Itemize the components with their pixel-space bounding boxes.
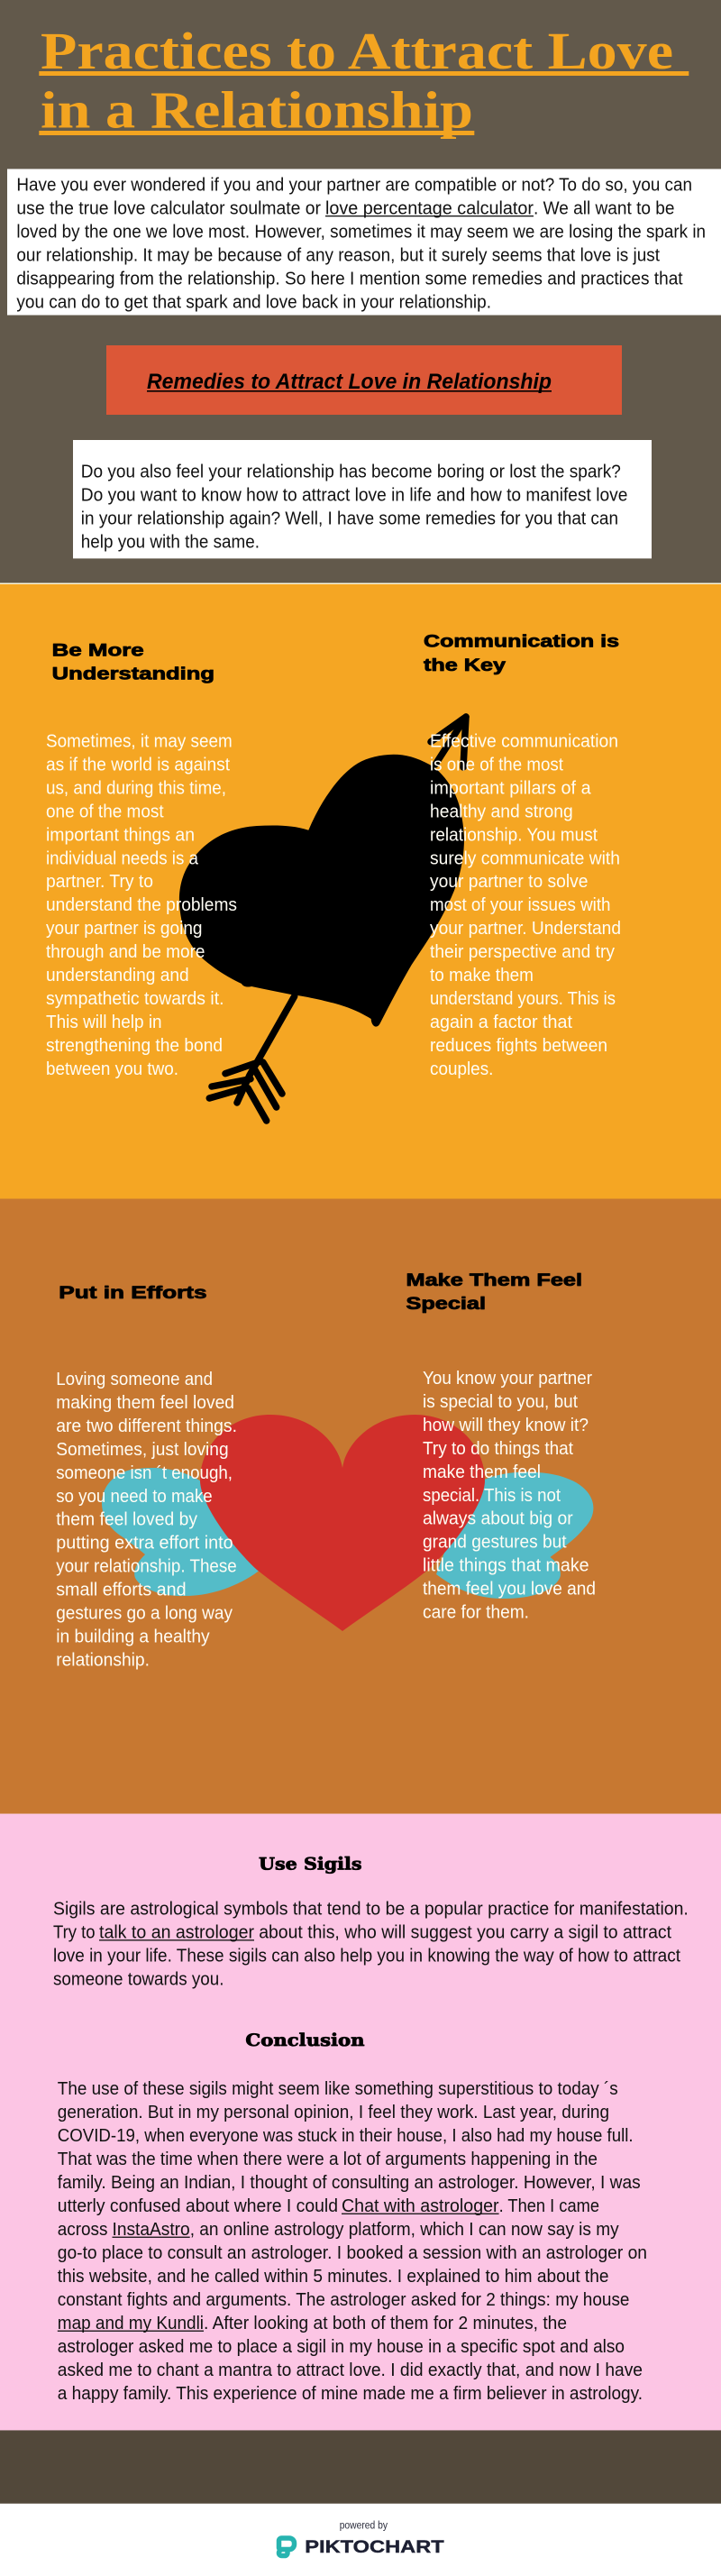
text: communication is the key: important pillars of a [430, 778, 591, 798]
text: make them feel special [423, 1369, 596, 1623]
text: communication is the key: surely communicate with [430, 848, 620, 868]
panel: remedies introduction: Do you want to know how to attract love in life and how to manifest love [81, 485, 627, 505]
heading: conclusion: Conclusion [245, 2031, 365, 2050]
text: conclusion: this website, and he called within 5 minutes. I explained to him about the [58, 2267, 609, 2287]
text: conclusion: generation. But in my personal opinion, I feel they work. Last year, during [58, 2103, 609, 2122]
text: make them feel special: always about big or [423, 1509, 573, 1529]
text: conclusion: across [58, 2220, 107, 2240]
panel: dark footer band [0, 2430, 721, 2504]
text: use sigils: about this, who will suggest you carry a sigil to attract [259, 1923, 671, 1943]
text: conclusion: asked me to chant a mantra to attract love. I did exactly that, and now I have [58, 2361, 643, 2380]
text: use sigils: someone towards you. [53, 1969, 224, 1989]
text: conclusion: . After looking at both of them for 2 minutes, the [204, 2314, 567, 2333]
panel: introduction text: love percentage calculator [325, 198, 534, 218]
panel: introduction text: Have you ever wondered if you and your partner are compatible or not? To do so, you can [16, 175, 692, 195]
text: conclusion: COVID-19, when everyone was stuck in their house, I also had my house full. [58, 2126, 634, 2146]
text: conclusion: astrologer asked me to place a sigil in my house in a specific spot and also [58, 2337, 625, 2357]
icon: black heart with arrow [179, 717, 466, 1121]
text: use sigils [53, 1900, 689, 1989]
panel: understanding and communication [0, 582, 721, 1199]
text: make them feel special: is special to you, but [423, 1392, 578, 1412]
text: conclusion: map and my Kundli [58, 2314, 204, 2333]
heading: communication is the key: the Key [424, 656, 507, 675]
panel: introduction text: disappearing from the relationship. So here I mention some remedies and practices that [16, 269, 683, 289]
text: communication is the key: understand yours. This is [430, 989, 616, 1009]
panel: remedies introduction: help you with the same. [81, 532, 260, 552]
text: conclusion: utterly confused about where I could [58, 2196, 338, 2216]
text: conclusion: a happy family. This experience of mine made me a firm believer in astrology. [58, 2384, 643, 2404]
heading: communication is the key: Communication is [424, 633, 619, 651]
text: communication is the key: most of your issues with [430, 895, 611, 915]
text: use sigils: talk to an astrologer [99, 1923, 254, 1943]
text: communication is the key: healthy and strong [430, 802, 573, 821]
text: be more understanding: understand the problems [46, 895, 237, 915]
panel: header [0, 0, 721, 582]
text: be more understanding: through and be more [46, 942, 205, 962]
text: powered by: powered by [340, 2520, 388, 2531]
panel: piktochart footer [0, 2504, 721, 2576]
heading: make them feel special: Make Them Feel [406, 1271, 582, 1290]
panel: remedies introduction: in your relationship again? Well, I have some remedies for you that can [81, 509, 618, 528]
text: conclusion: . Then I came [499, 2196, 599, 2216]
text: put in efforts: making them feel loved [56, 1393, 234, 1413]
panel: remedies heading: Remedies to Attract Love in Relationship [147, 370, 552, 394]
text: piktochart wordmark: PIKTOCHART [305, 2538, 444, 2557]
text: put in efforts [56, 1370, 237, 1670]
text: put in efforts: so you need to make [56, 1487, 213, 1507]
text: be more understanding: your partner is going [46, 919, 202, 939]
text: make them feel special: them feel you love and [423, 1580, 596, 1600]
text: be more understanding: individual needs is a [46, 848, 199, 868]
text: put in efforts: in building a healthy [56, 1627, 210, 1646]
text: put in efforts: gestures go a long way [56, 1603, 233, 1623]
text: communication is the key: to make them [430, 966, 534, 985]
text: make them feel special: Try to do things that [423, 1439, 573, 1459]
text: use sigils: Try to [53, 1923, 96, 1943]
text: make them feel special: how will they know it? [423, 1416, 589, 1435]
text: put in efforts: Loving someone and [56, 1370, 213, 1389]
text: be more understanding: sympathetic towards it. [46, 989, 224, 1009]
title: in a Relationship [41, 81, 473, 140]
panel: introduction text: use the true love calculator soulmate or [16, 198, 321, 218]
text: be more understanding: partner. Try to [46, 872, 153, 892]
panel: introduction text [7, 169, 721, 316]
heading: be more understanding [52, 641, 214, 683]
heading: communication is the key [424, 633, 619, 675]
text: communication is the key: their perspective and try [430, 942, 615, 962]
text: communication is the key [430, 732, 621, 1079]
heading: make them feel special: Special [406, 1295, 486, 1314]
text: conclusion: InstaAstro [112, 2220, 190, 2240]
text: be more understanding: between you two. [46, 1059, 178, 1079]
text: be more understanding: us, and during this time, [46, 778, 226, 798]
heading: use sigils: Use Sigils [259, 1854, 362, 1874]
text: put in efforts: them feel loved by [56, 1510, 197, 1530]
text: be more understanding: understanding and [46, 966, 189, 985]
text: make them feel special: care for them. [423, 1603, 529, 1623]
panel: remedies introduction: Do you also feel your relationship has become boring or lost the spark? [81, 462, 621, 481]
text: make them feel special: grand gestures but [423, 1533, 567, 1553]
text: conclusion: Chat with astrologer [342, 2196, 499, 2216]
text: make them feel special: special. This is not [423, 1486, 561, 1506]
text: put in efforts: small efforts and [56, 1581, 187, 1600]
text: use sigils: love in your life. These sigils can also help you in knowing the way of how to attract [53, 1946, 680, 1966]
heading: put in efforts: Put in Efforts [59, 1284, 207, 1303]
panel: sigils and conclusion [0, 1814, 721, 2430]
text: be more understanding: strengthening the bond [46, 1036, 223, 1056]
heading: be more understanding: Be More [52, 641, 144, 660]
text: be more understanding [46, 732, 237, 1079]
text: be more understanding: This will help in [46, 1013, 162, 1032]
text: use sigils: Sigils are astrological symbols that tend to be a popular practice for manifestation. [53, 1900, 689, 1920]
panel: introduction text: you can do to get that spark and love back in your relationship. [16, 292, 491, 312]
text: conclusion: , an online astrology platform, which I can now say is my [190, 2220, 619, 2240]
title: Practices to Attract Love [41, 22, 673, 80]
text: conclusion: constant fights and arguments. The astrologer asked for 2 things: my house [58, 2290, 630, 2310]
panel: efforts and feeling special [0, 1199, 721, 1814]
heading: make them feel special [406, 1271, 582, 1314]
text: conclusion: That was the time when there were a lot of arguments happening in the [58, 2150, 598, 2169]
text: communication is the key: your partner to solve [430, 872, 588, 892]
text: make them feel special: make them feel [423, 1462, 541, 1482]
text: conclusion: go-to place to consult an astrologer. I booked a session with an astrologer on [58, 2243, 647, 2263]
text: communication is the key: relationship. You must [430, 825, 598, 845]
panel: remedies introduction [73, 440, 652, 558]
panel: remedies heading [106, 345, 622, 415]
text: communication is the key: again a factor that [430, 1013, 572, 1032]
text: be more understanding: important things an [46, 825, 195, 845]
text: put in efforts: Sometimes, just loving [56, 1440, 229, 1460]
text: put in efforts: your relationship. These [56, 1557, 237, 1577]
heading: be more understanding: Understanding [52, 665, 214, 683]
title [39, 22, 689, 140]
text: put in efforts: are two different things. [56, 1416, 237, 1436]
text: be more understanding: one of the most [46, 802, 164, 821]
text: communication is the key: your partner. Understand [430, 919, 621, 939]
text: conclusion: family. Being an Indian, I thought of consulting an astrologer. However, I was [58, 2173, 641, 2193]
icon: red heart with teal wings [102, 1415, 593, 1631]
text: make them feel special: You know your partner [423, 1369, 592, 1389]
text: communication is the key: Effective communication [430, 732, 618, 752]
text: communication is the key: is one of the most [430, 756, 563, 775]
text: put in efforts: someone isn ´t enough, [56, 1463, 233, 1483]
text: be more understanding: as if the world is against [46, 756, 230, 775]
text: put in efforts: relationship. [56, 1650, 150, 1670]
text: communication is the key: reduces fights between [430, 1036, 607, 1056]
text: conclusion [58, 2079, 647, 2404]
text: communication is the key: couples. [430, 1059, 493, 1079]
panel: introduction text: . We all want to be [534, 198, 674, 218]
text: conclusion: The use of these sigils might seem like something superstitious to today ´s [58, 2079, 618, 2099]
icon: piktochart logo [278, 2538, 294, 2556]
panel: introduction text: our relationship. It may be because of any reason, but it surely seems that love is just [16, 245, 660, 265]
text: be more understanding: Sometimes, it may seem [46, 732, 233, 752]
text: make them feel special: little things that make [423, 1556, 589, 1576]
text: put in efforts: putting extra effort into [56, 1534, 233, 1554]
